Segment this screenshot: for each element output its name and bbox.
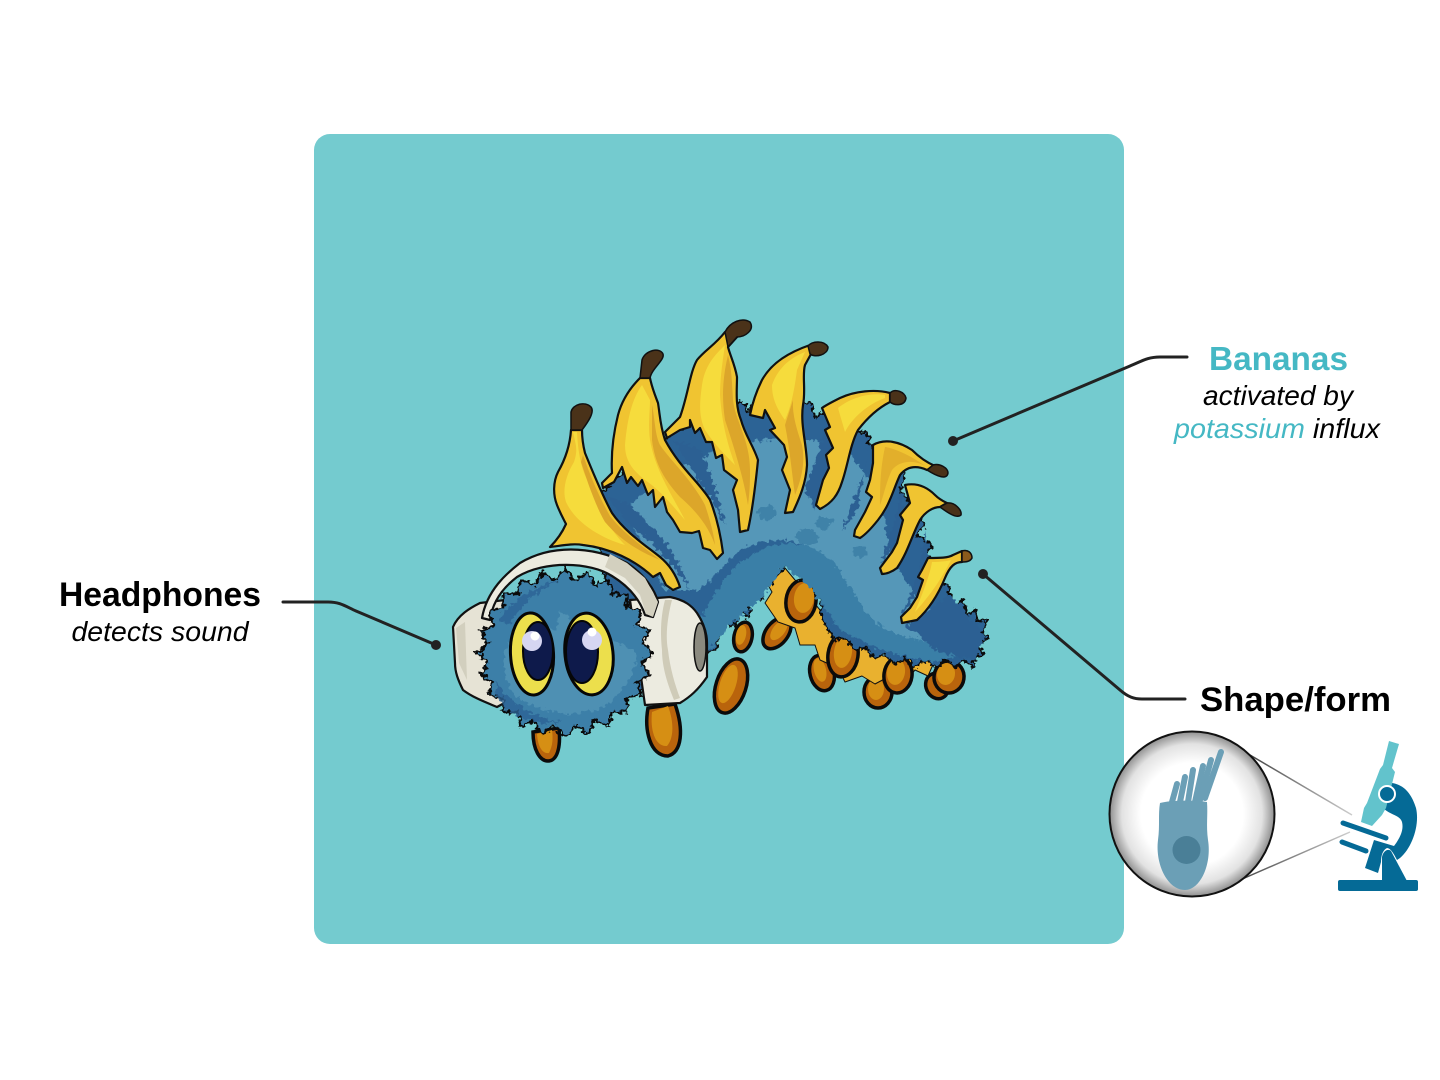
front legs <box>533 704 680 761</box>
banana 2 <box>602 350 723 559</box>
nucleus <box>1172 836 1200 864</box>
banana 3 <box>665 320 758 532</box>
cilia bundle <box>1172 752 1221 802</box>
leader line: headphones <box>283 602 441 650</box>
light fur band <box>625 438 965 647</box>
label: bananas: activated by <box>1203 380 1355 411</box>
banana 8 <box>901 550 972 623</box>
cell body <box>1158 801 1209 890</box>
tube <box>1361 741 1399 826</box>
label: bananas: Bananas <box>1209 340 1348 377</box>
yellow under-fur <box>765 568 935 684</box>
banana 7 <box>880 484 961 574</box>
right ear cup <box>630 597 707 705</box>
base <box>1338 880 1418 891</box>
furry head <box>477 569 653 737</box>
panel: teal background <box>314 134 1124 944</box>
label: bananas <box>1173 340 1381 444</box>
headphones <box>453 550 707 707</box>
front-body legs <box>783 578 966 695</box>
arm <box>1365 783 1417 873</box>
banana 1 <box>550 404 680 590</box>
headband <box>482 550 658 620</box>
label: headphones: detects sound <box>72 616 250 647</box>
fur blotches <box>758 506 868 557</box>
left eye <box>508 612 556 696</box>
illustration: banana caterpillar creature <box>453 320 988 761</box>
banana 5 <box>816 391 906 509</box>
leader line: bananas <box>948 357 1187 446</box>
magnification beams <box>1240 755 1352 880</box>
left ear cup <box>453 600 510 707</box>
objective knob <box>1379 786 1395 802</box>
icon: microscope <box>1338 741 1418 891</box>
furry blue body <box>600 395 988 690</box>
back legs <box>708 612 952 717</box>
central darker fur arc <box>695 543 975 662</box>
stage slides <box>1342 823 1386 851</box>
banana 4 <box>750 342 828 513</box>
right eye <box>561 611 617 697</box>
label: bananas: potassium influx <box>1173 413 1381 444</box>
leader line: shape/form <box>978 569 1185 699</box>
label: headphones <box>59 576 261 647</box>
label: headphones: Headphones <box>59 576 261 614</box>
label: shape/form: Shape/form <box>1200 681 1391 719</box>
pillar <box>1382 850 1407 881</box>
banana 6 <box>854 441 948 538</box>
dark fur shadows <box>605 418 985 660</box>
magnified circle with hair cell <box>1110 732 1274 896</box>
